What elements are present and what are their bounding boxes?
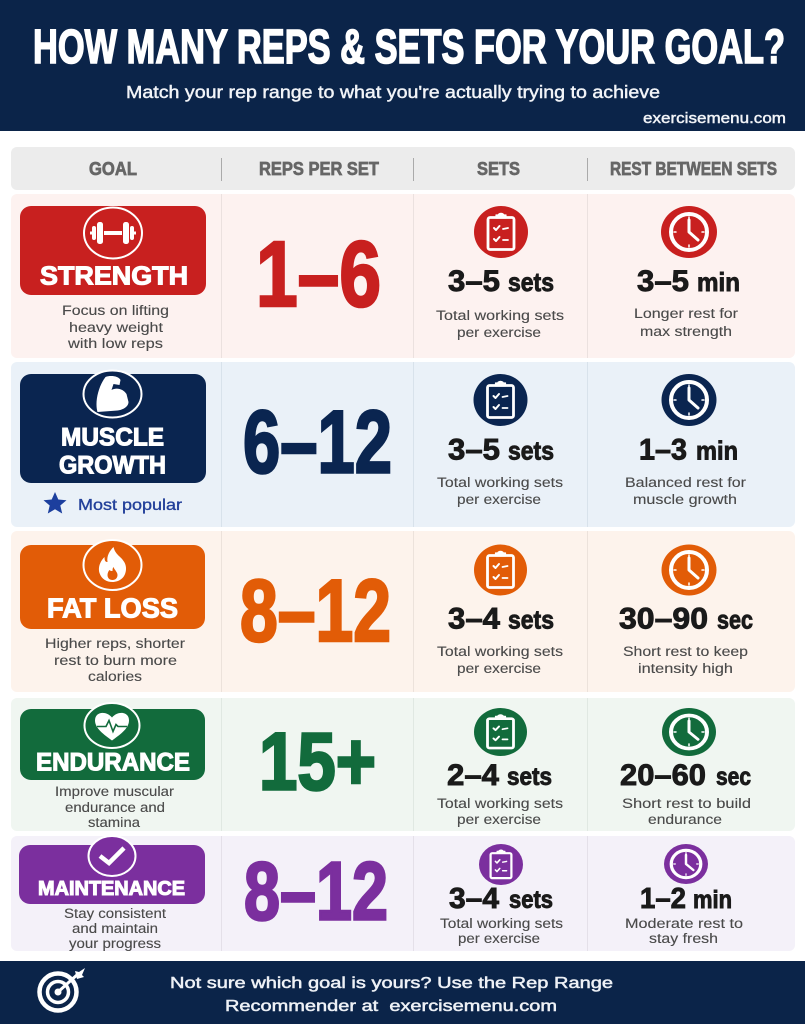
- icon: clipboard: [474, 708, 527, 756]
- most popular label: Most popular: [78, 497, 183, 514]
- rest note: [625, 475, 747, 507]
- rest value: [619, 602, 753, 636]
- description: maintenance: and maintain: [72, 921, 158, 936]
- sets value: [448, 265, 554, 298]
- badge: muscle growth: [20, 370, 206, 483]
- panel: fat loss row: [11, 531, 795, 692]
- icon: clock: [661, 206, 717, 258]
- description: endurance: Improve muscular: [55, 784, 175, 799]
- rest note: [625, 916, 743, 946]
- sets value: 3–4: [448, 602, 500, 636]
- panel: maintenance row: [11, 836, 795, 951]
- reps: 8–12: 8–12: [244, 844, 388, 938]
- description: endurance: [55, 784, 175, 830]
- rest note: muscle growth: [633, 492, 737, 507]
- sets note: Total working sets: [437, 475, 563, 490]
- column heading: reps per set: REPS PER SET: [259, 159, 379, 179]
- rest note: Moderate rest to: [625, 916, 743, 931]
- rest note: Short rest to keep: [623, 644, 748, 659]
- column heading: rest between sets: REST BETWEEN SETS: [610, 159, 777, 179]
- reps: 8–12: 8–12: [240, 561, 391, 660]
- call to action text: Recommender at exercisemenu.com: [225, 998, 557, 1015]
- description: endurance: endurance and: [65, 800, 165, 815]
- rest value: min: [696, 436, 738, 466]
- icon: clock: [662, 708, 716, 756]
- sets value: [448, 602, 554, 636]
- badge: fat loss: [20, 540, 205, 629]
- panel: strength row: [11, 194, 795, 358]
- subtitle: Match your rep range to what you're actually trying to achieve: [126, 82, 660, 102]
- sets note: per exercise: [457, 661, 541, 676]
- description: strength: [62, 303, 169, 351]
- badge: endurance: [20, 703, 205, 780]
- sets note: Total working sets: [440, 916, 563, 931]
- reps: 6–12: 6–12: [243, 392, 392, 492]
- description: fat loss: calories: [88, 669, 142, 684]
- sets note: [437, 644, 563, 676]
- badge: muscle growth: MUSCLE: [61, 424, 164, 452]
- icon: check mark: [88, 836, 136, 876]
- rest note: Longer rest for: [634, 306, 739, 321]
- sets note: [437, 796, 563, 827]
- rest note: [634, 306, 739, 339]
- description: fat loss: [45, 636, 186, 684]
- badge: maintenance: MAINTENANCE: [38, 877, 185, 900]
- rest value: 3–5: [637, 265, 689, 298]
- description: endurance: stamina: [88, 815, 141, 830]
- rest note: [623, 644, 748, 676]
- icon: clock: [662, 374, 716, 426]
- description: maintenance: your progress: [69, 936, 161, 951]
- header banner: [0, 0, 805, 131]
- rest value: 20–60: [620, 759, 706, 792]
- description: fat loss: Higher reps, shorter: [45, 636, 186, 651]
- table header row: [11, 147, 795, 190]
- rest note: max strength: [640, 324, 732, 339]
- sets note: per exercise: [458, 931, 540, 946]
- icon: clipboard: [479, 844, 523, 885]
- panel: endurance row: [11, 698, 795, 831]
- rest value: sec: [716, 763, 751, 791]
- description: fat loss: rest to burn more: [54, 653, 177, 668]
- sets value: sets: [509, 886, 553, 914]
- description: maintenance: [64, 906, 166, 951]
- icon: flexed arm: [84, 370, 142, 418]
- rest value: min: [697, 267, 740, 297]
- icon: heart with pulse: [84, 703, 140, 748]
- description: maintenance: Stay consistent: [64, 906, 166, 921]
- column heading: goal: GOAL: [89, 159, 137, 179]
- call to action text: [170, 975, 613, 1015]
- sets note: per exercise: [457, 325, 541, 340]
- badge: strength: [20, 206, 206, 295]
- sets value: sets: [508, 267, 554, 297]
- sets value: 3–4: [449, 883, 499, 915]
- rest value: 1–2: [640, 883, 686, 915]
- rest value: 30–90: [619, 602, 708, 636]
- sets note: per exercise: [457, 492, 541, 507]
- icon: target with arrow: [40, 968, 85, 1010]
- sets note: Total working sets: [437, 796, 563, 811]
- sets note: [436, 308, 564, 340]
- sets value: 2–4: [447, 759, 499, 792]
- rest value: [637, 265, 740, 298]
- icon: star: [44, 492, 66, 514]
- rest value: [620, 759, 751, 792]
- rest value: min: [693, 886, 732, 914]
- icon: clipboard: [474, 544, 527, 596]
- sets note: Total working sets: [437, 644, 563, 659]
- rest value: 1–3: [639, 434, 687, 466]
- sets note: [440, 916, 563, 946]
- sets value: [448, 434, 554, 466]
- sets value: 3–5: [448, 265, 500, 298]
- rest value: [640, 883, 732, 915]
- badge: maintenance: [19, 836, 205, 904]
- sets note: Total working sets: [436, 308, 564, 323]
- sets value: sets: [508, 604, 554, 634]
- sets note: per exercise: [457, 812, 541, 827]
- icon: dumbbell: [84, 208, 142, 258]
- website: exercisemenu.com: [643, 110, 786, 127]
- badge: endurance: ENDURANCE: [36, 748, 190, 776]
- rest note: Short rest to build: [622, 796, 751, 811]
- badge: muscle growth: GROWTH: [59, 452, 166, 480]
- sets value: sets: [508, 436, 554, 466]
- description: strength: Focus on lifting: [62, 303, 169, 318]
- description: strength: with low reps: [67, 336, 163, 351]
- icon: clipboard: [474, 374, 528, 426]
- sets value: 3–5: [448, 434, 500, 466]
- column heading: sets: SETS: [477, 159, 520, 179]
- badge: strength: STRENGTH: [40, 260, 188, 290]
- sets note: [437, 475, 563, 507]
- footer banner: [0, 961, 805, 1024]
- sets value: [447, 759, 552, 792]
- rest note: intensity high: [638, 661, 733, 676]
- icon: clock: [664, 844, 708, 884]
- rest value: sec: [717, 604, 753, 634]
- panel: muscle growth row: [11, 362, 795, 527]
- rest value: [639, 434, 738, 466]
- badge: fat loss: FAT LOSS: [47, 592, 178, 624]
- rest note: stay fresh: [649, 931, 718, 946]
- icon: clock: [662, 544, 716, 596]
- sets value: [449, 883, 553, 915]
- sets value: sets: [507, 763, 552, 791]
- rest note: Balanced rest for: [625, 475, 747, 490]
- reps: 15+: 15+: [259, 716, 376, 808]
- rest note: [622, 796, 751, 827]
- rest note: endurance: [648, 812, 722, 827]
- description: strength: heavy weight: [69, 320, 163, 335]
- call to action text: Not sure which goal is yours? Use the Rep Range: [170, 975, 613, 992]
- icon: flame: [84, 540, 142, 590]
- icon: clipboard: [474, 206, 528, 258]
- reps: 1–6: 1–6: [256, 222, 381, 326]
